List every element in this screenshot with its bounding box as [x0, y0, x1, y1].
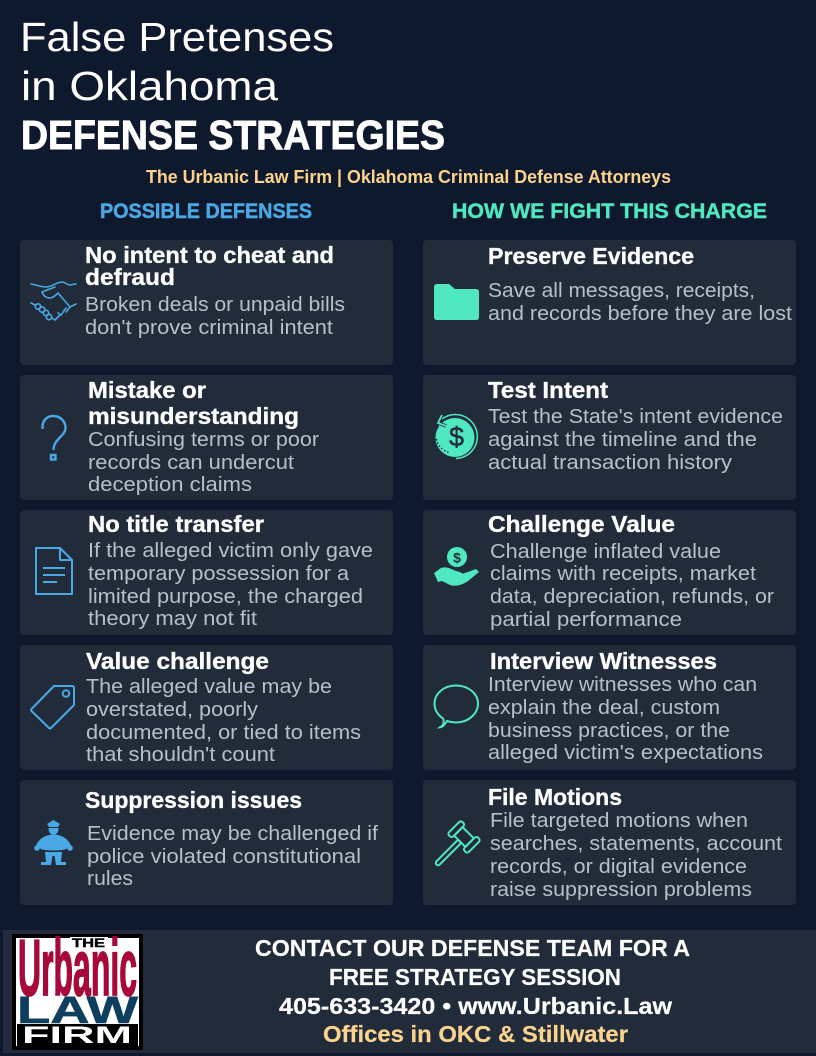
subtitle: The Urbanic Law Firm | Oklahoma Criminal Defense Attorneys: [146, 167, 671, 187]
text block: partial performance: [490, 609, 682, 631]
text block: against the timeline and the: [488, 429, 757, 451]
icon: document: [36, 548, 72, 594]
text block: [88, 429, 319, 496]
icon: question mark: [42, 416, 66, 460]
text block: File targeted motions when: [490, 810, 748, 832]
heading: how we fight this charge: HOW WE FIGHT THIS CHARGE: [452, 200, 767, 223]
panel: value challenge: [20, 645, 393, 770]
text block: Confusing terms or poor: [88, 429, 319, 451]
heading: [85, 242, 334, 290]
heading: File Motions: [488, 784, 622, 810]
text block: Challenge inflated value: [490, 541, 721, 563]
title: [20, 14, 445, 158]
logo: Urbanic Law Firm: THE: [72, 936, 105, 950]
icon: price tag: [31, 686, 74, 728]
text block: that shouldn't count: [86, 744, 275, 766]
icon: dollar with return arrow: [436, 415, 477, 458]
icon: dollar with return arrow: $: [449, 422, 464, 452]
icon: gavel: [427, 820, 481, 874]
heading: Interview Witnesses: [490, 648, 717, 674]
text block: records can undercut: [88, 452, 294, 474]
heading: Value challenge: [86, 648, 269, 674]
logo: Urbanic Law Firm: LAW: [17, 990, 138, 1032]
text block: [87, 823, 378, 890]
icon: handshake: [31, 282, 76, 320]
icon: hand holding coin: [434, 547, 479, 586]
text block: and records before they are lost: [488, 303, 792, 325]
icon: folder: [434, 284, 479, 320]
text block: documented, or tied to items: [86, 722, 361, 744]
heading: [88, 377, 299, 429]
contact text: Offices in OKC & Stillwater: [323, 1021, 628, 1047]
heading: Challenge Value: [488, 511, 675, 537]
text block: Test the State's intent evidence: [488, 406, 783, 428]
text block: [488, 406, 783, 474]
panel: file motions: [423, 780, 796, 905]
text block: Save all messages, receipts,: [488, 280, 755, 302]
text block: [88, 540, 373, 630]
logo: Urbanic Law Firm: FIRM: [22, 1022, 132, 1049]
heading: Suppression issues: [85, 787, 302, 813]
text block: searches, statements, account: [490, 833, 782, 855]
heading: possible defenses: POSSIBLE DEFENSES: [100, 200, 312, 223]
panel: interview witnesses: [423, 645, 796, 770]
contact text: CONTACT OUR DEFENSE TEAM FOR A: [255, 935, 690, 961]
text block: limited purpose, the charged: [88, 586, 363, 608]
text block: raise suppression problems: [490, 879, 752, 901]
panel: contact footer: [3, 923, 816, 1053]
text block: temporary possession for a: [88, 563, 350, 585]
heading: Preserve Evidence: [488, 243, 694, 269]
text block: business practices, or the: [488, 720, 730, 742]
text block: police violated constitutional: [87, 846, 361, 868]
heading: No title transfer: [88, 511, 264, 537]
text block: Broken deals or unpaid bills: [85, 294, 345, 316]
text block: theory may not fit: [88, 608, 257, 630]
text block: [86, 676, 361, 766]
text block: [490, 810, 782, 901]
text block: Interview witnesses who can: [488, 674, 757, 696]
contact text: FREE STRATEGY SESSION: [329, 964, 621, 990]
heading: Mistake or: [88, 377, 206, 403]
icon: hand holding coin: $: [453, 550, 461, 566]
panel: challenge value: [423, 510, 796, 635]
text block: [85, 294, 345, 339]
text block: claims with receipts, market: [490, 563, 756, 585]
contact text: [255, 935, 690, 1047]
text block: rules: [87, 868, 133, 890]
panel: test intent: [423, 375, 796, 500]
heading: Test Intent: [488, 377, 608, 403]
text block: Evidence may be challenged if: [87, 823, 378, 845]
text block: [490, 541, 774, 631]
panel: suppression issues: [20, 780, 393, 905]
icon: police officer: [34, 820, 73, 865]
title: DEFENSE STRATEGIES: [21, 112, 445, 158]
title: False Pretenses: [20, 14, 334, 60]
title: in Oklahoma: [21, 63, 278, 109]
icon: speech bubble: [434, 686, 478, 727]
logo: Urbanic Law Firm: [12, 923, 143, 1050]
text block: If the alleged victim only gave: [88, 540, 373, 562]
panel: mistake or misunderstanding: [20, 375, 393, 500]
heading: No intent to cheat and: [85, 242, 334, 268]
text block: records, or digital evidence: [490, 856, 747, 878]
text block: don't prove criminal intent: [85, 317, 333, 339]
heading: misunderstanding: [88, 403, 299, 429]
contact text: 405-633-3420 • www.Urbanic.Law: [279, 993, 672, 1019]
text block: explain the deal, custom: [488, 697, 720, 719]
text block: actual transaction history: [488, 452, 732, 474]
text block: The alleged value may be: [86, 676, 332, 698]
text block: deception claims: [88, 474, 252, 496]
text block: alleged victim's expectations: [488, 742, 763, 764]
panel: no title transfer: [20, 510, 393, 635]
text block: overstated, poorly: [86, 699, 258, 721]
panel: preserve evidence: [423, 240, 796, 365]
text block: [488, 280, 792, 325]
panel: contact footer: Urbanic: [18, 923, 137, 1012]
panel: no intent to cheat and defraud: [20, 240, 393, 365]
heading: defraud: [85, 264, 175, 290]
text block: data, depreciation, refunds, or: [490, 586, 774, 608]
text block: [488, 674, 763, 764]
